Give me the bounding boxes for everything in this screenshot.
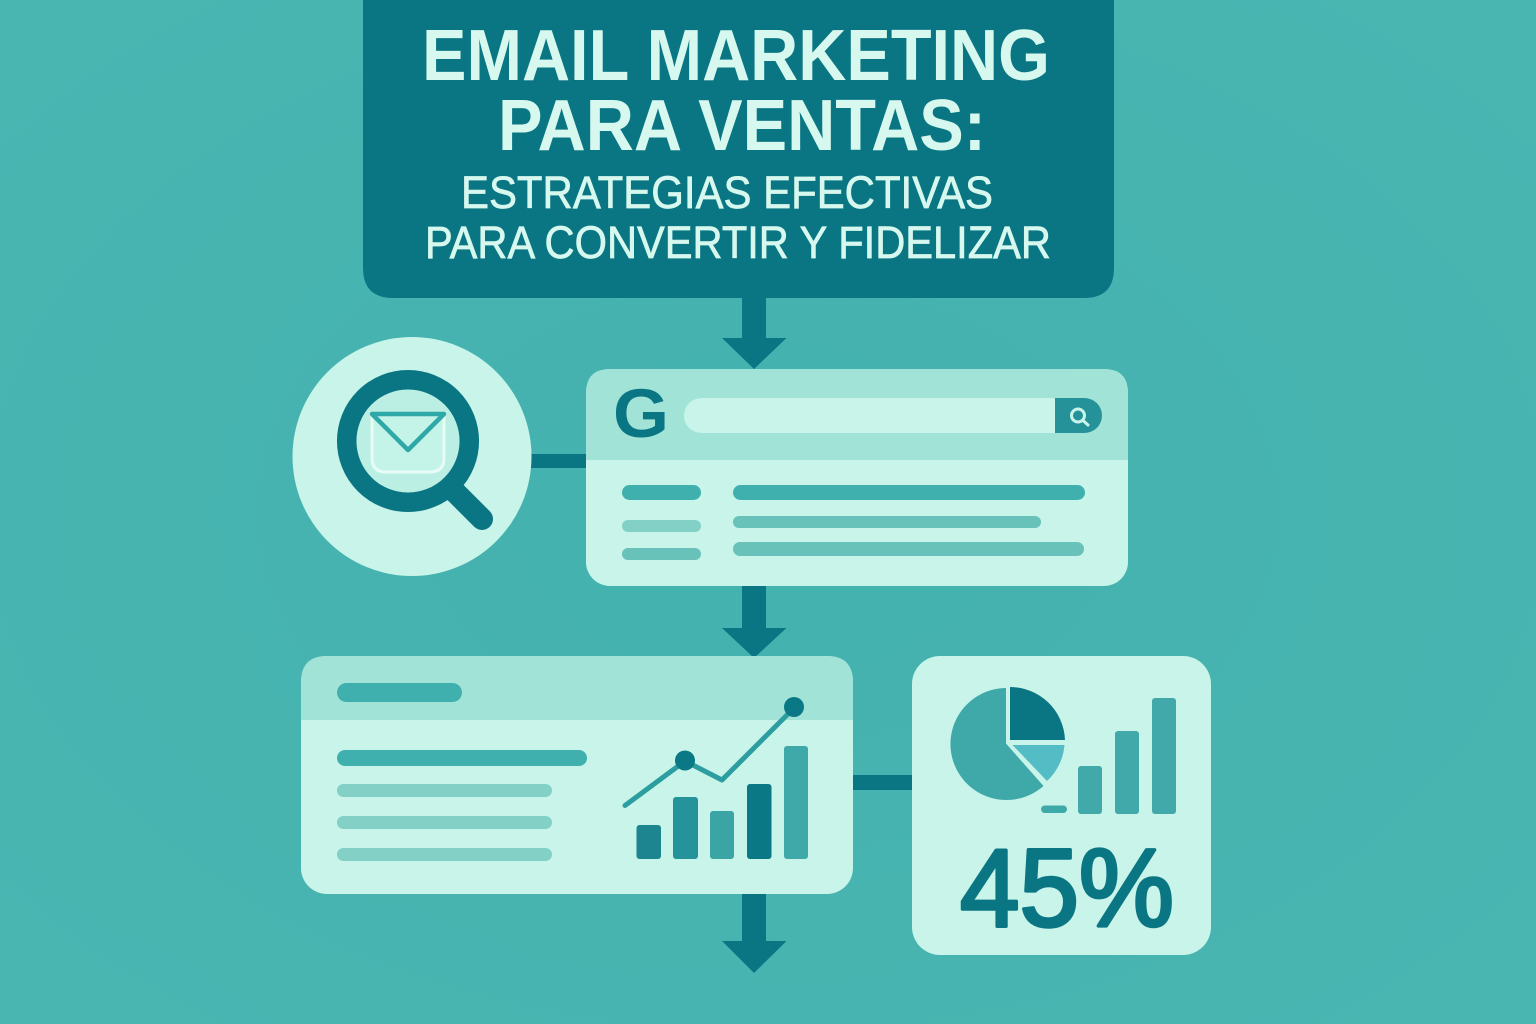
small pill — [1041, 806, 1067, 813]
subtitle line 2: PARA CONVERTIR Y FIDELIZAR — [425, 217, 1051, 268]
bar chart — [636, 746, 808, 859]
panel: statistics — [912, 656, 1211, 955]
bar chart — [1078, 698, 1176, 814]
pie chart — [950, 687, 1065, 800]
connector: icon to search panel — [525, 454, 591, 468]
result rows — [622, 485, 1085, 560]
arrow: report downward — [722, 888, 786, 973]
heading line 2: PARA VENTAS: — [498, 86, 986, 166]
panel: report — [301, 656, 853, 894]
line chart — [625, 697, 804, 806]
arrow: search to report — [722, 580, 786, 658]
statistic: 45%: 45% — [960, 827, 1174, 950]
title panel — [363, 0, 1114, 298]
panel: search results — [586, 369, 1128, 586]
text rows — [337, 750, 587, 861]
header pill — [337, 683, 462, 702]
search bar — [684, 398, 1102, 433]
subtitle line 1: ESTRATEGIAS EFECTIVAS — [461, 167, 993, 218]
envelope — [372, 414, 444, 472]
icon: G logo: G — [613, 375, 669, 452]
arrow: title to search — [722, 290, 786, 369]
icon: magnifier over envelope — [292, 337, 532, 576]
connector: report to stats panel — [848, 775, 918, 790]
heading line 1: EMAIL MARKETING — [422, 16, 1050, 96]
